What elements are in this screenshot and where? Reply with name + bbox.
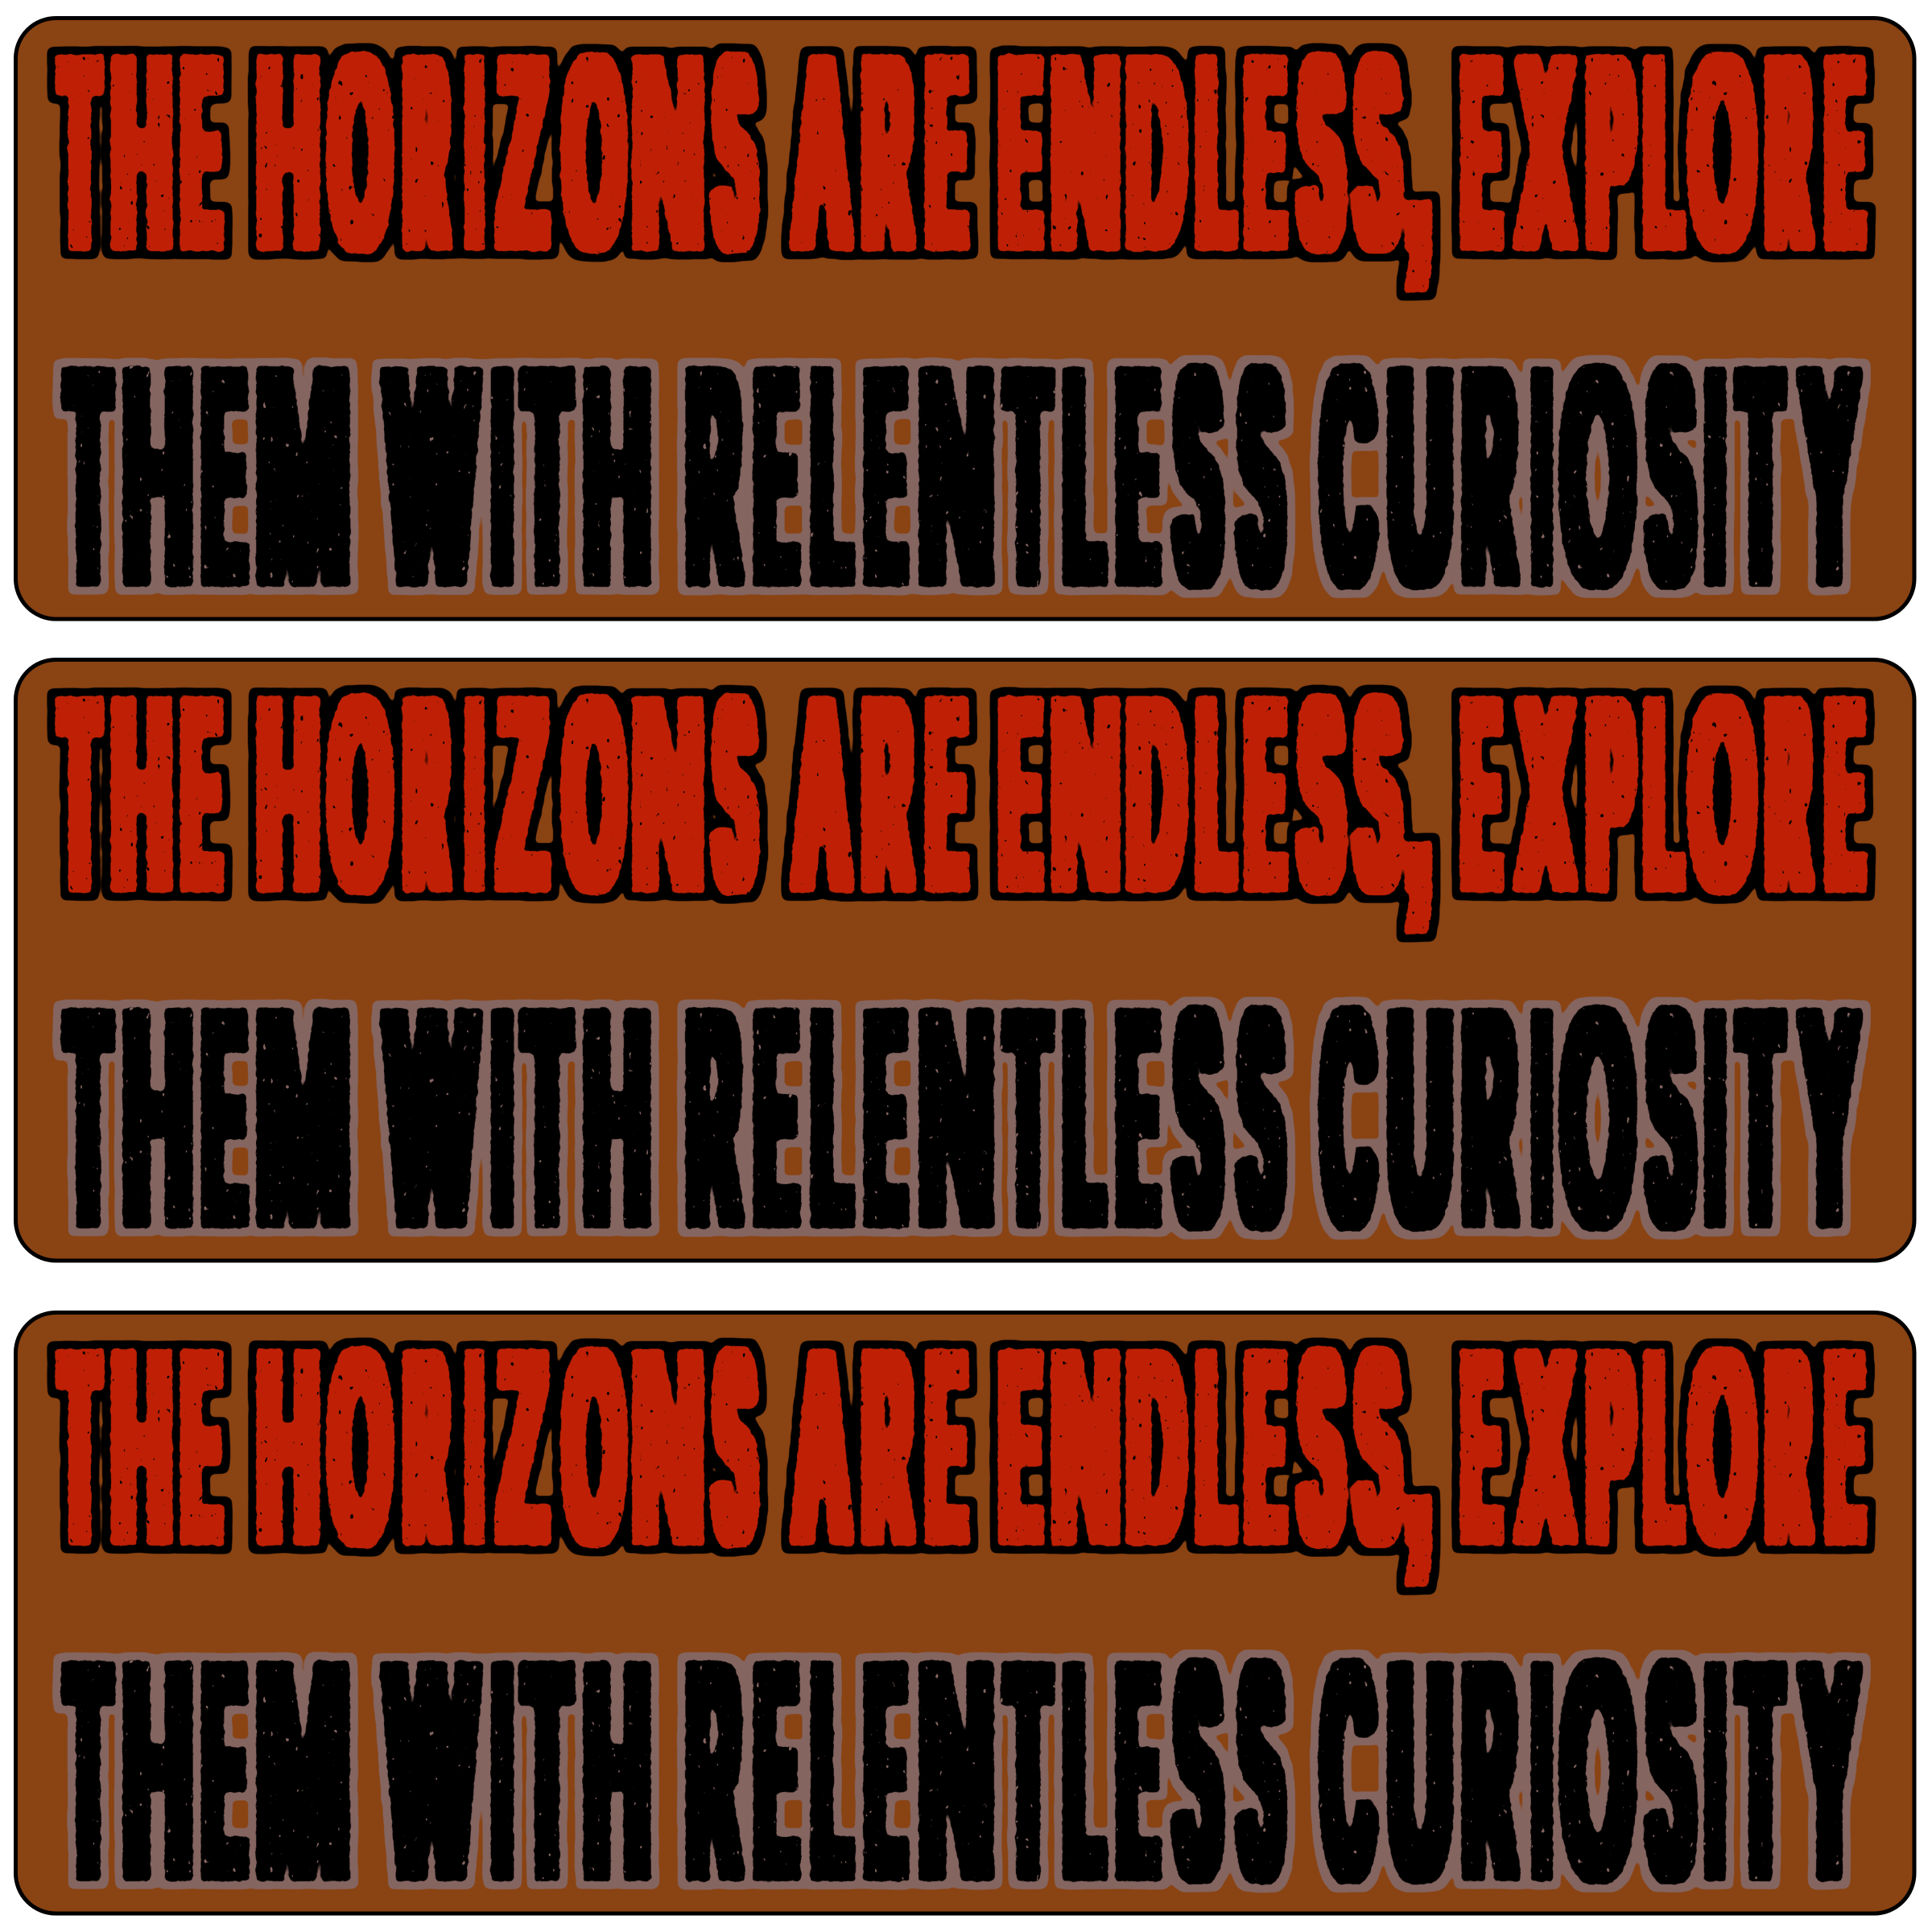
banner 3 heading line 1: S (1300, 1296, 1343, 1597)
banner 3 heading line 1: R (864, 1296, 910, 1597)
banner 2 heading line 2: H (123, 948, 192, 1288)
banner 3 heading line 1: Z (499, 1296, 546, 1597)
banner 2 heading line 1: N (633, 643, 704, 944)
banner 2 heading line 1: E (1001, 643, 1040, 944)
banner 2 heading line 1: D (1128, 643, 1184, 944)
banner 3 heading line 1: H (258, 1296, 319, 1597)
banner 2 heading line 2: E (1119, 948, 1158, 1288)
banner 3 heading line 2: H (123, 1601, 192, 1932)
banner 2 heading line 2 (67, 948, 1857, 1288)
banner 1 heading line 1: S (1356, 2, 1399, 303)
banner 2 heading line 1: H (113, 643, 171, 944)
banner 3 heading line 2: I (1534, 1601, 1550, 1932)
banner 1 heading line 1: X (1519, 2, 1573, 303)
banner 3 heading line 1: E (928, 1296, 964, 1597)
banner 2 heading line 1: O (330, 643, 390, 944)
banner 1 heading line 2: T (1007, 307, 1049, 646)
banner 3 heading line 1: T (61, 1296, 98, 1597)
banner 1 heading line 2: H (584, 307, 650, 646)
banner 1 heading line 1: O (564, 2, 624, 303)
banner 1 heading line 2: S (1649, 307, 1693, 646)
banner 2 heading line 2: S (1240, 948, 1282, 1288)
banner 3 heading line 1: R (406, 1296, 447, 1597)
banner 3 heading line 1: X (1519, 1296, 1573, 1597)
banner 3 heading line 1: N (633, 1296, 704, 1597)
banner 3 heading line 1: A (795, 1296, 849, 1597)
banner 1 heading line 2: I (494, 307, 510, 646)
banner 1 heading line 1: R (864, 2, 910, 303)
banner 3 heading line 2: S (1240, 1601, 1282, 1932)
banner 1 heading line 2: W (387, 307, 477, 646)
banner 1 heading line 1: O (1690, 2, 1754, 303)
banner 2 heading line 2: T (1007, 948, 1049, 1288)
banner 1 heading line 1: S (715, 2, 755, 303)
banner 2 heading line 2: W (387, 948, 477, 1288)
banner 2 heading line 2: E (757, 948, 796, 1288)
banner 1 heading line 2: N (919, 307, 994, 646)
banner 3 heading line 2: E (204, 1601, 245, 1932)
banner 2 heading line 1: E (184, 643, 219, 944)
banner 2 heading line 1: S (1300, 643, 1343, 944)
banner 3 heading line 2: C (1323, 1601, 1374, 1932)
banner 2 heading line 1: A (795, 643, 849, 944)
banner 2 heading line 2: R (687, 948, 739, 1288)
banner 3 heading line 2: R (687, 1601, 739, 1932)
banner 1 heading line 2: I (1534, 307, 1550, 646)
banner 3 heading line 2: E (1119, 1601, 1158, 1932)
banner 3 heading line 2: T (67, 1601, 109, 1932)
banner 3 heading line 2: S (1649, 1601, 1693, 1932)
banner 1 heading line 2: T (1740, 307, 1781, 646)
banner 2 heading line 1: , (1406, 643, 1431, 944)
banner 1 heading line 1 (61, 2, 1862, 303)
banner 3 heading line 1: P (1588, 1296, 1633, 1597)
banner 1 heading line 2: R (687, 307, 739, 646)
banner 3 heading line 2: H (584, 1601, 650, 1932)
banner 2 heading line 2: T (67, 948, 109, 1288)
banner 2 heading line 2: M (256, 948, 350, 1288)
banner 3 heading line 2: I (494, 1601, 510, 1932)
banner 2 heading line 2: L (814, 948, 850, 1288)
banner 2 heading line 1 (61, 643, 1862, 944)
banner 3 heading line 2: L (814, 1601, 850, 1932)
banner 3 heading line 1: O (1690, 1296, 1754, 1597)
banner 2 heading line 1: N (1051, 643, 1120, 944)
banner 2 heading line 2: O (1562, 948, 1634, 1288)
banner 3 heading line 2 (67, 1601, 1857, 1932)
banner 2 heading line 1: Z (499, 643, 546, 944)
banner 1 heading line 1: E (1001, 2, 1040, 303)
banner 2 heading line 1: O (1690, 643, 1754, 944)
banner 3 heading line 1: S (1356, 1296, 1399, 1597)
banner 1 heading line 2: L (1066, 307, 1103, 646)
banner 1 heading line 2: I (1707, 307, 1723, 646)
banner 3 heading line 2: R (1464, 1601, 1514, 1932)
banner 2 heading line 1: O (564, 643, 624, 944)
banner 2 heading line 2: E (204, 948, 245, 1288)
banner 3 heading line 2: T (525, 1601, 569, 1932)
banner 2 heading line 1: S (715, 643, 755, 944)
banner 2 heading line 1: L (1646, 643, 1681, 944)
banner 2 heading line 2: I (494, 948, 510, 1288)
banner 2 heading line 2: H (584, 948, 650, 1288)
banner 1 heading line 2: S (1240, 307, 1282, 646)
banner 2 heading line 1: H (258, 643, 319, 944)
banner 1 heading line 1: E (1247, 2, 1283, 303)
banner 1 heading line 1: T (61, 2, 98, 303)
banner 2 heading line 2: I (1534, 948, 1550, 1288)
banner 2 heading line 2: U (1389, 948, 1451, 1288)
banner 2 heading line 1: E (928, 643, 964, 944)
banner 1 heading line 2: S (1176, 307, 1220, 646)
banner 1 heading line 1: A (795, 2, 849, 303)
banner 2 heading line 2: S (1649, 948, 1693, 1288)
banner 3 heading line 1: I (469, 1296, 481, 1597)
banner 3 heading line 2: N (919, 1601, 994, 1932)
banner 1 heading line 2: T (525, 307, 569, 646)
banner 1 heading line 2: U (1389, 307, 1451, 646)
banner 1 heading line 1: R (406, 2, 447, 303)
banner 2 heading line 2: E (867, 948, 905, 1288)
banner 3 heading line 1: L (1199, 1296, 1233, 1597)
panel: banner 3 (16, 1296, 1914, 1932)
banner 2 heading line 1: S (1356, 643, 1399, 944)
banner 2 heading line 2: I (1707, 948, 1723, 1288)
panel: banner 2 (16, 643, 1914, 1288)
banner 2 heading line 1: E (1247, 643, 1283, 944)
banner 2 heading line 1: R (864, 643, 910, 944)
banner 3 heading line 2: T (1740, 1601, 1781, 1932)
banner 3 heading line 1: E (1001, 1296, 1040, 1597)
banner 1 heading line 2: E (1119, 307, 1158, 646)
banner 3 background (16, 1312, 1914, 1913)
banner 1 heading line 1: H (113, 2, 171, 303)
banner 1 heading line 1: E (928, 2, 964, 303)
banner 3 heading line 1: E (1463, 1296, 1499, 1597)
banner 1 heading line 1: P (1588, 2, 1633, 303)
banner 1 heading line 1: N (633, 2, 704, 303)
banner 1 heading line 1: E (184, 2, 219, 303)
banner 3 heading line 2: T (1007, 1601, 1049, 1932)
banner 3 heading line 2: M (256, 1601, 350, 1932)
banner 1 heading line 2 (67, 307, 1857, 646)
banner 1 heading line 1: D (1128, 2, 1184, 303)
banner 2 heading line 1: X (1519, 643, 1573, 944)
banner 1 heading line 2: E (204, 307, 245, 646)
banner 3 heading line 1: D (1128, 1296, 1184, 1597)
banner 2 heading line 2: R (1464, 948, 1514, 1288)
banner 3 heading line 1: L (1646, 1296, 1681, 1597)
banner 1 heading line 2: C (1323, 307, 1374, 646)
banner 3 heading line 1: O (330, 1296, 390, 1597)
banner 3 heading line 2: E (867, 1601, 905, 1932)
banner 3 heading line 1: H (113, 1296, 171, 1597)
banner 2 heading line 1: P (1588, 643, 1633, 944)
banner 3 heading line 1: N (1051, 1296, 1120, 1597)
banner 2 heading line 2: C (1323, 948, 1374, 1288)
banner 3 heading line 2: I (1707, 1601, 1723, 1932)
banner 1 heading line 2: E (757, 307, 796, 646)
banner 1 heading line 2: T (67, 307, 109, 646)
banner 2 heading line 1: E (1463, 643, 1499, 944)
banner 3 heading line 2: O (1562, 1601, 1634, 1932)
banner 2 heading line 2: N (919, 948, 994, 1288)
banner 1 heading line 1: Z (499, 2, 546, 303)
banner 3 heading line 1: S (715, 1296, 755, 1597)
banner 1 heading line 1: , (1406, 2, 1431, 303)
banner 1 heading line 2: H (123, 307, 192, 646)
banner 2 heading line 1: R (406, 643, 447, 944)
banner 1 heading line 1: O (330, 2, 390, 303)
banner 1 heading line 1: L (1646, 2, 1681, 303)
banner 3 heading line 1: , (1406, 1296, 1431, 1597)
banner 3 heading line 2: E (757, 1601, 796, 1932)
banner 3 heading line 2: U (1389, 1601, 1451, 1932)
banner 3 heading line 1: E (184, 1296, 219, 1597)
banner 1 heading line 2: R (1464, 307, 1514, 646)
banner 1 heading line 1: N (1051, 2, 1120, 303)
banner 3 heading line 2: L (1066, 1601, 1103, 1932)
banner 1 heading line 2: M (256, 307, 350, 646)
banner 2 heading line 2: L (1066, 948, 1103, 1288)
banner 2 heading line 1: I (469, 643, 481, 944)
banner 1 background (16, 18, 1914, 619)
banner 1 heading line 2: L (814, 307, 850, 646)
banner 2 heading line 2: T (525, 948, 569, 1288)
banner 2 heading line 2: S (1176, 948, 1220, 1288)
banner 2 background (16, 660, 1914, 1261)
banner 1 heading line 2: O (1562, 307, 1634, 646)
banner 1 heading line 1: L (1199, 2, 1233, 303)
banner 2 heading line 1: T (61, 643, 98, 944)
panel: banner 1 (16, 2, 1914, 646)
banner 2 heading line 1: L (1199, 643, 1233, 944)
banner 1 heading line 1: I (469, 2, 481, 303)
banner 3 heading line 2: S (1176, 1601, 1220, 1932)
banner 1 heading line 1: H (258, 2, 319, 303)
banner 1 heading line 2: E (867, 307, 905, 646)
banner 3 heading line 1 (61, 1296, 1862, 1597)
banner 1 heading line 1: E (1463, 2, 1499, 303)
banner 3 heading line 2: W (387, 1601, 477, 1932)
banner 3 heading line 1: E (1247, 1296, 1283, 1597)
banner 1 heading line 1: S (1300, 2, 1343, 303)
banner 3 heading line 1: O (564, 1296, 624, 1597)
banner 2 heading line 2: T (1740, 948, 1781, 1288)
